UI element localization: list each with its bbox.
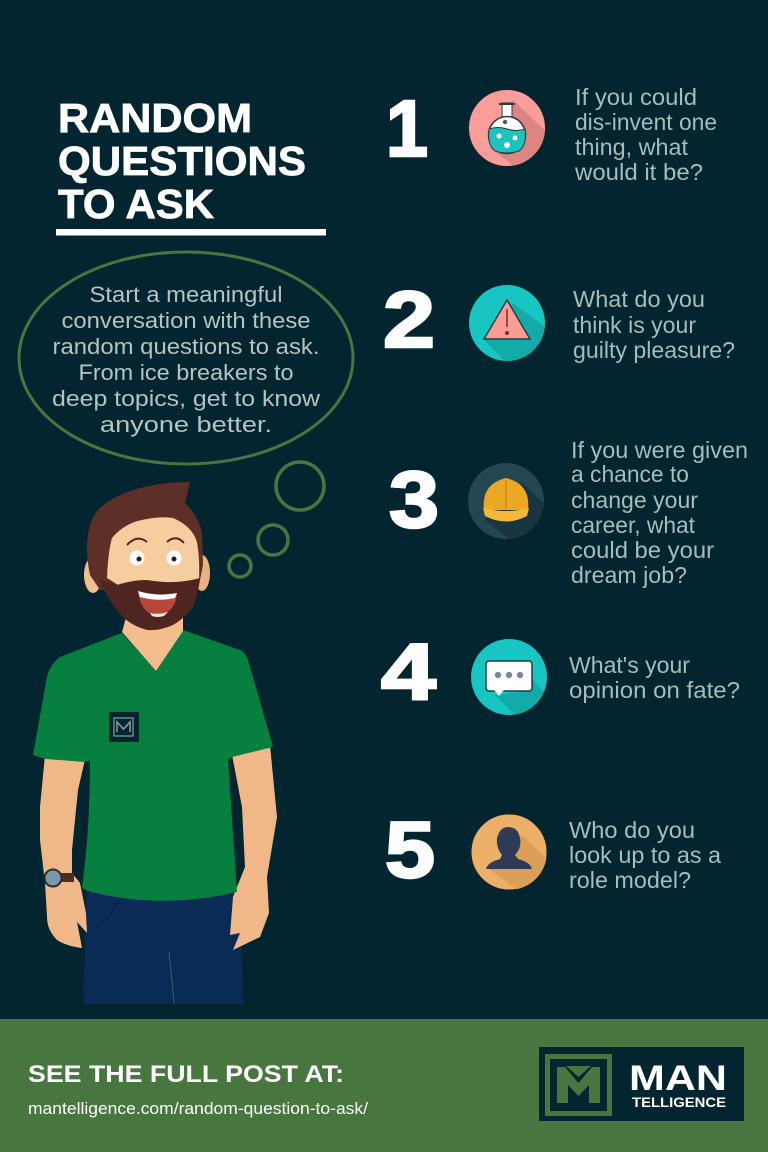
question 1: dis-invent one	[575, 109, 717, 135]
thought bubble	[19, 252, 353, 577]
number 1: 1	[386, 84, 428, 173]
right arm	[230, 745, 277, 950]
intro text: random questions to ask.	[52, 334, 320, 359]
item 3: career	[389, 437, 748, 588]
mouth	[138, 591, 177, 617]
beard	[100, 578, 200, 630]
number 5: 5	[385, 805, 435, 894]
face	[107, 517, 199, 605]
number 3: 3	[389, 455, 439, 544]
logo	[539, 1047, 744, 1121]
hair	[87, 482, 203, 590]
question 3: could be your	[571, 537, 714, 563]
logo: MAN	[629, 1059, 727, 1098]
intro text: conversation with these	[62, 308, 310, 333]
intro text: Start a meaningful	[90, 282, 282, 307]
title: RANDOM	[58, 95, 252, 141]
eyebrows	[127, 539, 147, 545]
item 4: fate	[380, 639, 740, 715]
question 1: If you could	[575, 84, 697, 110]
question 3: career, what	[571, 512, 696, 538]
title: TO ASK	[58, 181, 214, 227]
question 3: change your	[571, 487, 698, 513]
icon: hard hat	[468, 463, 544, 539]
question 2: guilty pleasure?	[573, 337, 735, 363]
number 4: 4	[381, 627, 437, 716]
icon: warning triangle	[469, 285, 545, 361]
question 3: dream job?	[571, 562, 687, 588]
question 3	[571, 437, 748, 588]
item 2: guilty pleasure	[384, 285, 734, 363]
question 4: opinion on fate?	[569, 677, 740, 703]
question 2: What do you	[573, 286, 705, 312]
icon: flask	[468, 89, 546, 167]
logo: TELLIGENCE	[632, 1094, 726, 1110]
question 1	[574, 84, 717, 185]
ears	[84, 557, 102, 593]
item 5: role model	[386, 814, 721, 890]
footer url: mantelligence.com/random-question-to-ask/	[28, 1099, 368, 1118]
left arm	[40, 755, 87, 948]
footer heading: SEE THE FULL POST AT:	[28, 1061, 344, 1088]
icon: speech bubble	[471, 639, 547, 715]
intro text	[52, 282, 321, 437]
number 2: 2	[383, 275, 435, 364]
intro text: From ice breakers to	[78, 360, 294, 385]
title: QUESTIONS	[58, 138, 306, 184]
question 3: If you were given	[571, 437, 748, 463]
question 1: would it be?	[574, 159, 703, 185]
watch	[44, 870, 74, 886]
question 5	[569, 817, 721, 893]
footer band	[0, 1019, 768, 1152]
eyes	[130, 550, 144, 566]
question 3: a chance to	[571, 461, 689, 487]
icon: person	[470, 814, 548, 890]
intro text: deep topics, get to know	[52, 386, 321, 411]
pants	[83, 885, 243, 1004]
neck	[122, 610, 183, 671]
question 2	[573, 286, 735, 363]
shirt logo	[109, 712, 139, 742]
item 1: dis-invent	[390, 88, 716, 180]
question 4: What's your	[569, 652, 690, 678]
question 2: think is your	[573, 312, 696, 338]
character illustration	[33, 482, 277, 1004]
shirt	[33, 630, 273, 901]
question 5: role model?	[569, 867, 691, 893]
question 5: Who do you	[569, 817, 695, 843]
question 1: thing, what	[575, 134, 689, 160]
question 5: look up to as a	[569, 842, 721, 868]
title	[56, 95, 326, 236]
question 4	[569, 652, 740, 703]
intro text: anyone better.	[100, 412, 272, 437]
